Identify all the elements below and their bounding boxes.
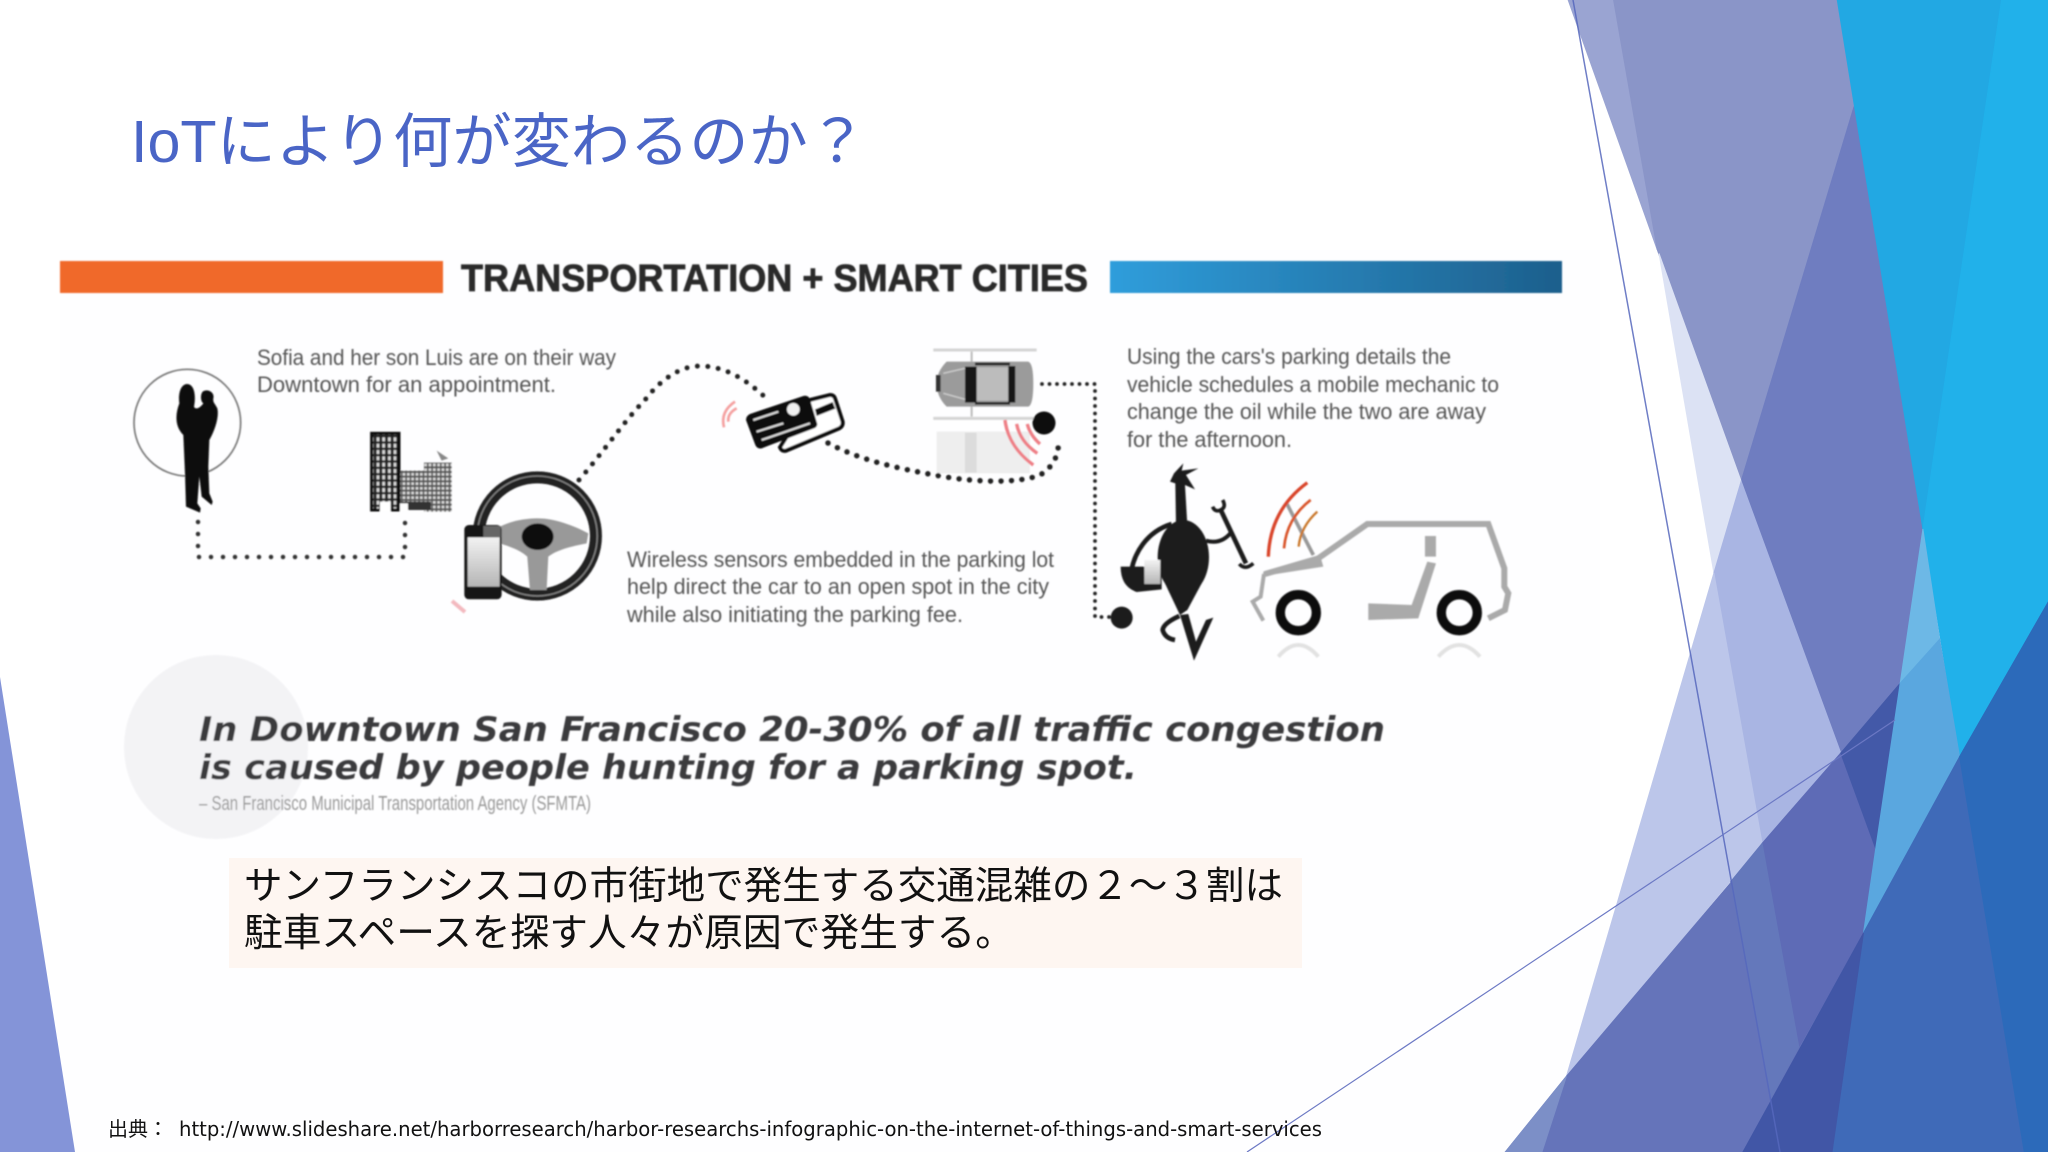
dotted path: home to downtown	[198, 520, 405, 557]
statistic block	[124, 655, 1385, 839]
text: wireless sensors: while also initiating the parking fee.	[626, 602, 963, 627]
citation: http://www.slideshare.net/harborresearch/harbor-researchs-infographic-on-the-internet-of-things-and-smart-services	[179, 1117, 1322, 1141]
japanese translation box	[229, 858, 1302, 968]
orange bar	[60, 261, 443, 293]
text: wireless sensors	[626, 547, 1054, 627]
icon: car with open hood	[1253, 483, 1508, 657]
citation: 出典：	[108, 1118, 168, 1141]
text: Sofia and Luis: Downtown for an appointment.	[257, 372, 556, 397]
text: mobile mechanic	[1127, 344, 1499, 452]
icon: smartphone	[464, 525, 502, 599]
dotted path: wheel to card	[579, 366, 770, 480]
blue bar	[1110, 261, 1562, 293]
infographic panel	[60, 258, 1562, 839]
text: Sofia and Luis	[257, 345, 616, 397]
icon: city buildings	[372, 433, 452, 512]
slide background	[60, 250, 1600, 1152]
icon: parking card	[746, 395, 843, 451]
text: wireless sensors: Wireless sensors embedded in the parking lot	[627, 547, 1054, 572]
icon: mechanic	[1111, 463, 1253, 661]
text: wireless sensors: help direct the car to an open spot in the city	[627, 574, 1049, 599]
statistic text: In Downtown San Francisco 20-30% of all traffic congestion	[199, 710, 1385, 750]
japanese translation box: サンフランシスコの市街地で発生する交通混雑の２～３割は	[244, 865, 1283, 908]
text: mobile mechanic: for the afternoon.	[1127, 427, 1292, 452]
icon: empty parking spot ghost car	[937, 432, 1030, 473]
decorative facet: bottom left triangle	[0, 677, 75, 1152]
icon: parked car from above	[933, 350, 1037, 418]
text: mobile mechanic: vehicle schedules a mobile mechanic to	[1127, 372, 1499, 397]
text: mobile mechanic: Using the cars's parking details the	[1127, 344, 1451, 369]
icon: sensor dot	[1032, 412, 1056, 434]
heading band	[60, 258, 1562, 300]
icon: sensor waves	[1005, 420, 1040, 465]
heading text: TRANSPORTATION + SMART CITIES	[461, 258, 1088, 300]
decorative facet shapes: right side	[1505, 0, 2048, 1152]
text: mobile mechanic: change the oil while the two are away	[1127, 399, 1486, 424]
text: Sofia and Luis: Sofia and her son Luis are on their way	[257, 345, 616, 370]
statistic block: is caused by people hunting for a parking spot.	[199, 748, 1137, 788]
japanese translation box: 駐車スペースを探す人々が原因で発生する。	[244, 912, 1014, 955]
icon: steering wheel	[477, 476, 597, 596]
icon: pink signal near phone	[452, 601, 465, 612]
icon: mother and child in circle	[134, 369, 241, 513]
source line: – San Francisco Municipal Transportation Agency (SFMTA)	[199, 793, 591, 815]
grey circle	[124, 655, 308, 839]
title: IoTにより何が変わるのか？	[131, 109, 867, 175]
icon: signal by card	[723, 402, 737, 427]
dotted path: card to parking spot	[828, 440, 1058, 481]
dotted path: car to mechanic	[1042, 384, 1112, 617]
